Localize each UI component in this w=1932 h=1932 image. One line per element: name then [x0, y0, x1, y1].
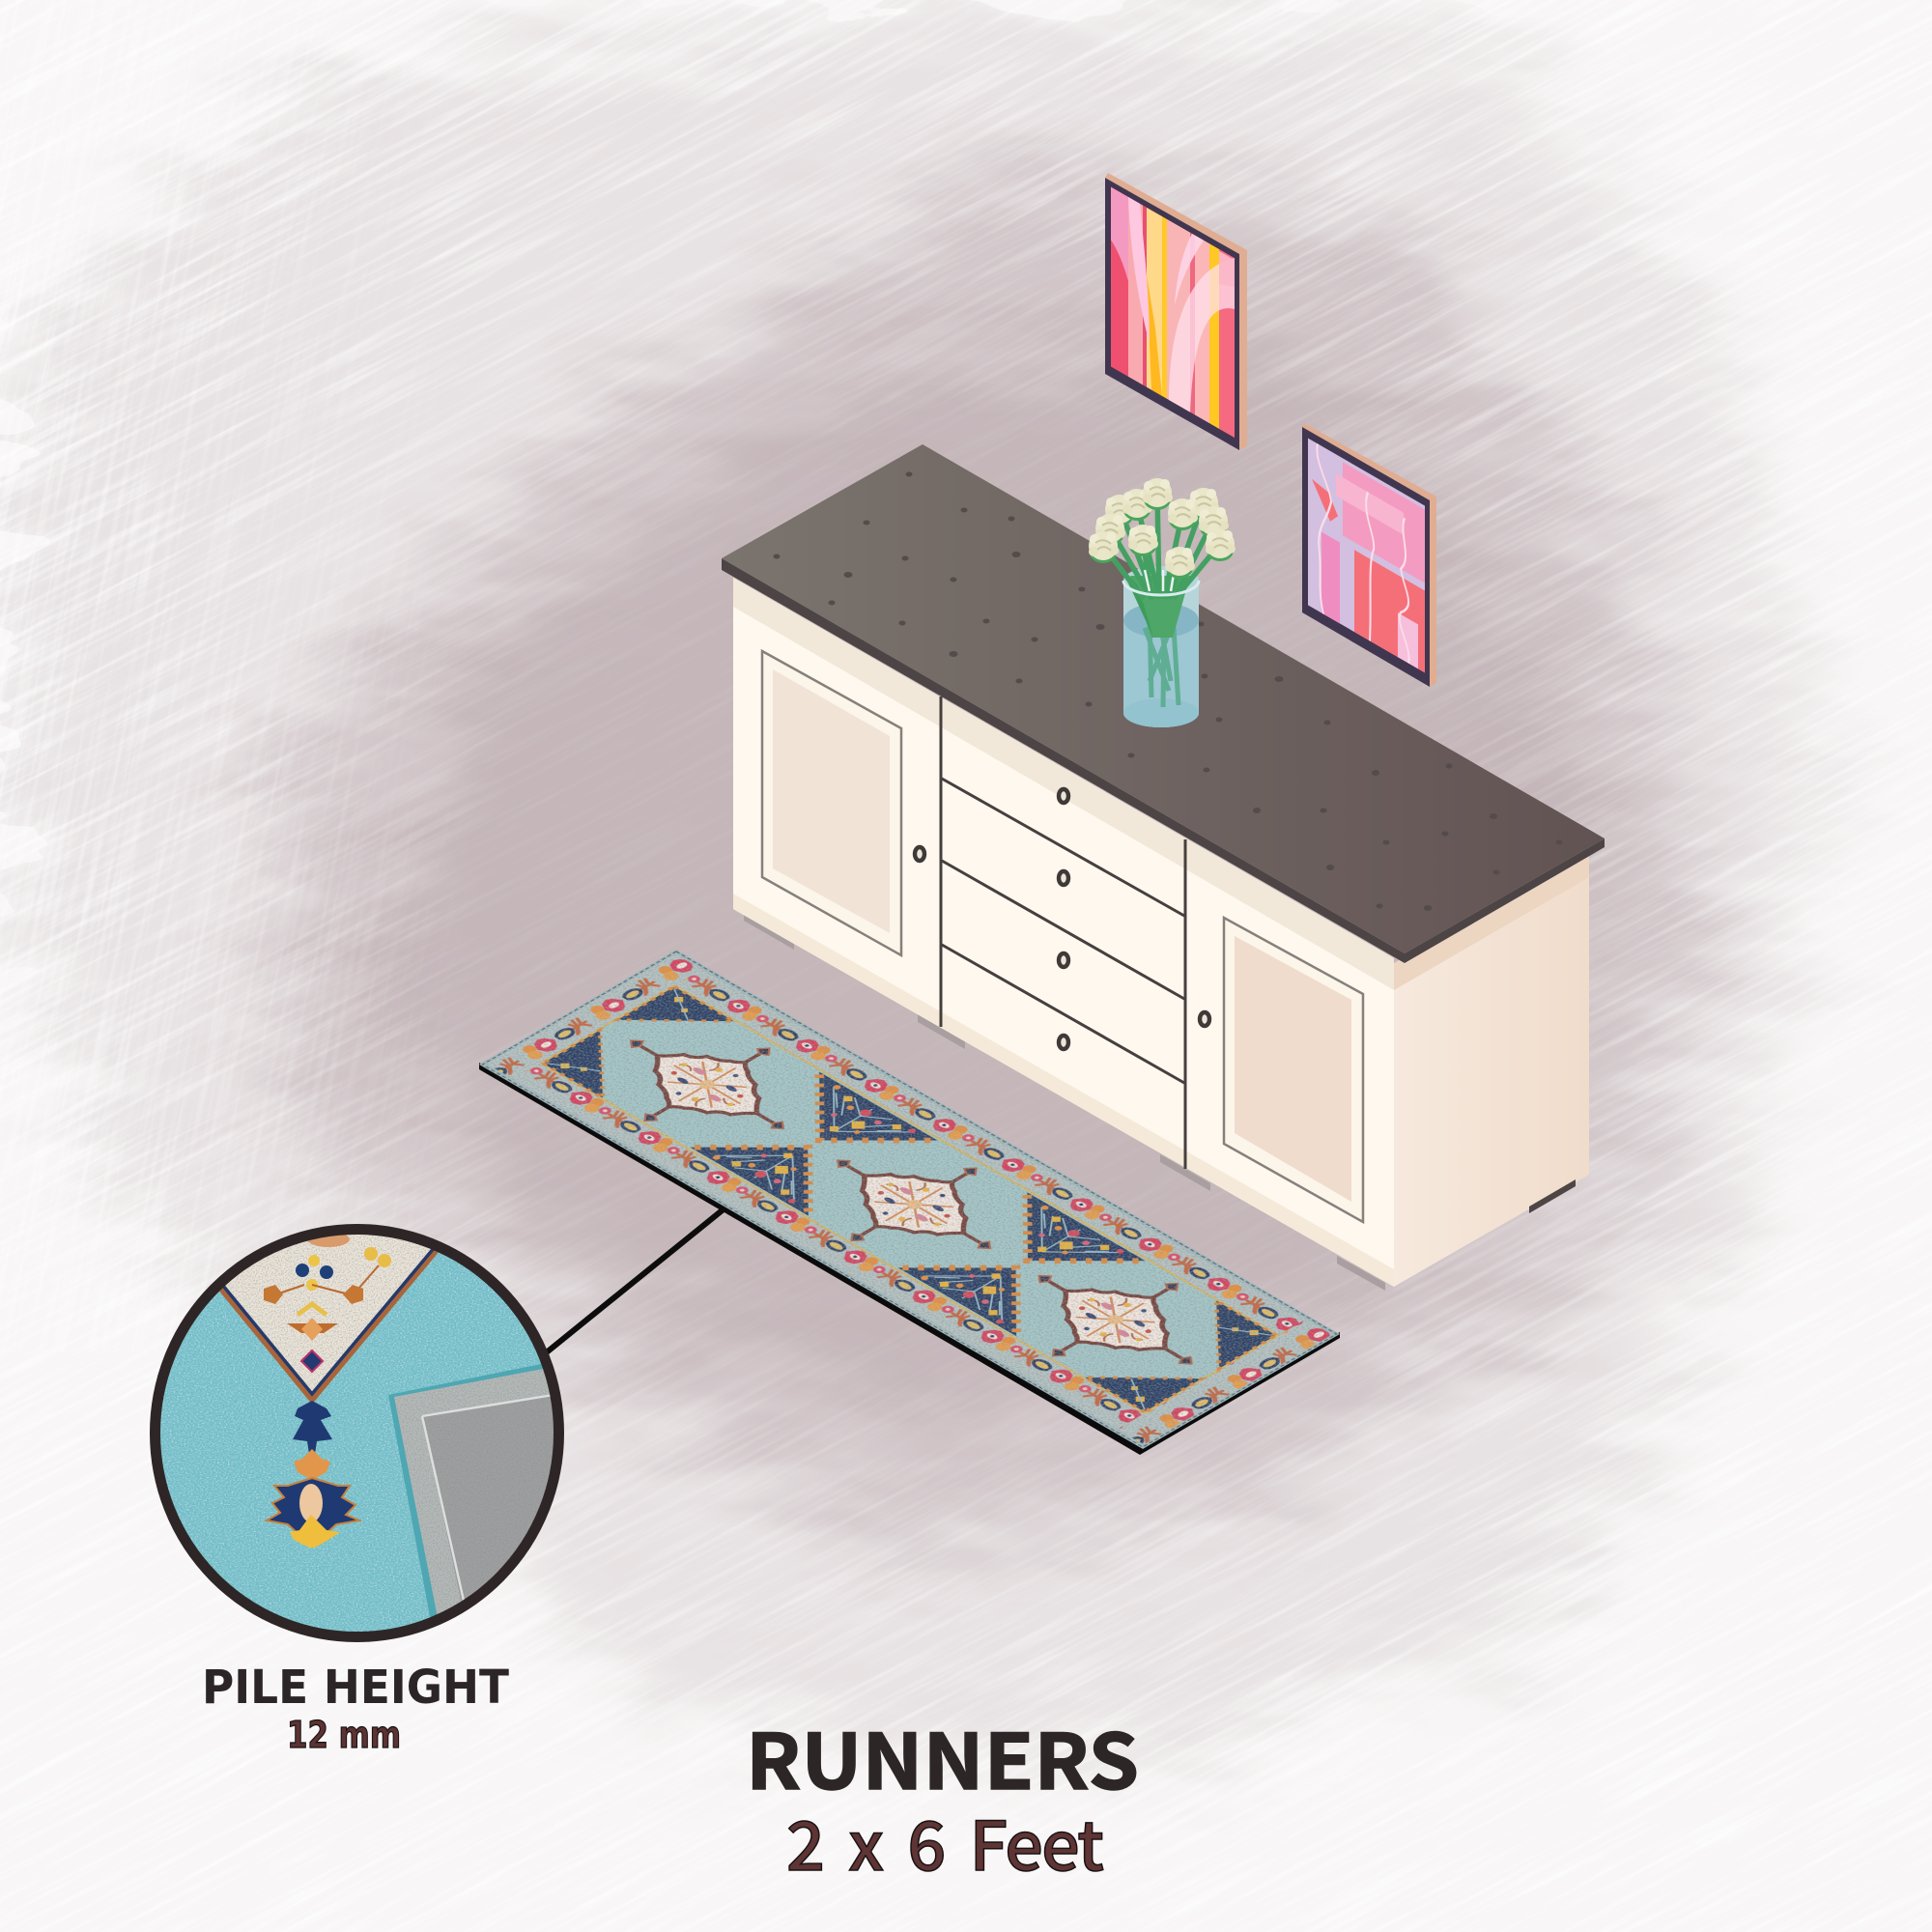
rug runner — [479, 950, 1340, 1455]
inset rug close-up — [160, 1235, 554, 1632]
inset ring — [155, 1229, 558, 1636]
tip motifs — [264, 1232, 391, 1372]
left door panel — [762, 651, 901, 955]
water — [1123, 603, 1199, 727]
pendant ornament — [267, 1401, 359, 1548]
stem bundle at rim — [1103, 493, 1220, 638]
cabinet — [722, 444, 1605, 1291]
glass rim — [1123, 581, 1199, 595]
wall art: geometric pink frame — [1302, 423, 1436, 687]
rug medallions — [568, 1004, 1254, 1401]
rug surface — [479, 950, 1340, 1449]
title — [746, 1700, 1139, 1890]
countertop speckles — [773, 471, 1563, 911]
pile height label: PILE HEIGHT — [202, 1661, 509, 1715]
rug field — [541, 985, 1278, 1413]
flower heads — [1089, 478, 1236, 579]
cabinet feet — [744, 913, 1385, 1291]
rug side triangles — [690, 1072, 1146, 1336]
rug border bands — [487, 954, 1332, 1444]
rug thickness edge — [479, 1063, 1340, 1455]
title: RUNNERS — [746, 1700, 1139, 1811]
door and drawer dividers — [941, 696, 1185, 1169]
size subtitle: 2 x 6 Feet — [786, 1793, 1104, 1890]
right door panel — [1224, 918, 1363, 1222]
submerged stems — [1145, 618, 1179, 707]
pile height value: 12 mm — [287, 1714, 401, 1756]
knobs — [915, 789, 1209, 1049]
cabinet side face — [1394, 850, 1589, 1287]
glass cylinder back — [1123, 566, 1199, 727]
cabinet front face — [733, 578, 1394, 1287]
pile height label — [202, 1661, 509, 1756]
rug corner triangles — [543, 986, 1276, 1412]
flower vase — [1089, 478, 1236, 727]
cream medallion tip — [220, 1217, 454, 1399]
inset detail circle — [145, 1217, 580, 1652]
folded rug backing — [388, 1362, 580, 1652]
callout line from rug to inset — [543, 1208, 724, 1355]
wall art: striped abstract frame — [1105, 173, 1247, 450]
countertop — [722, 444, 1605, 963]
